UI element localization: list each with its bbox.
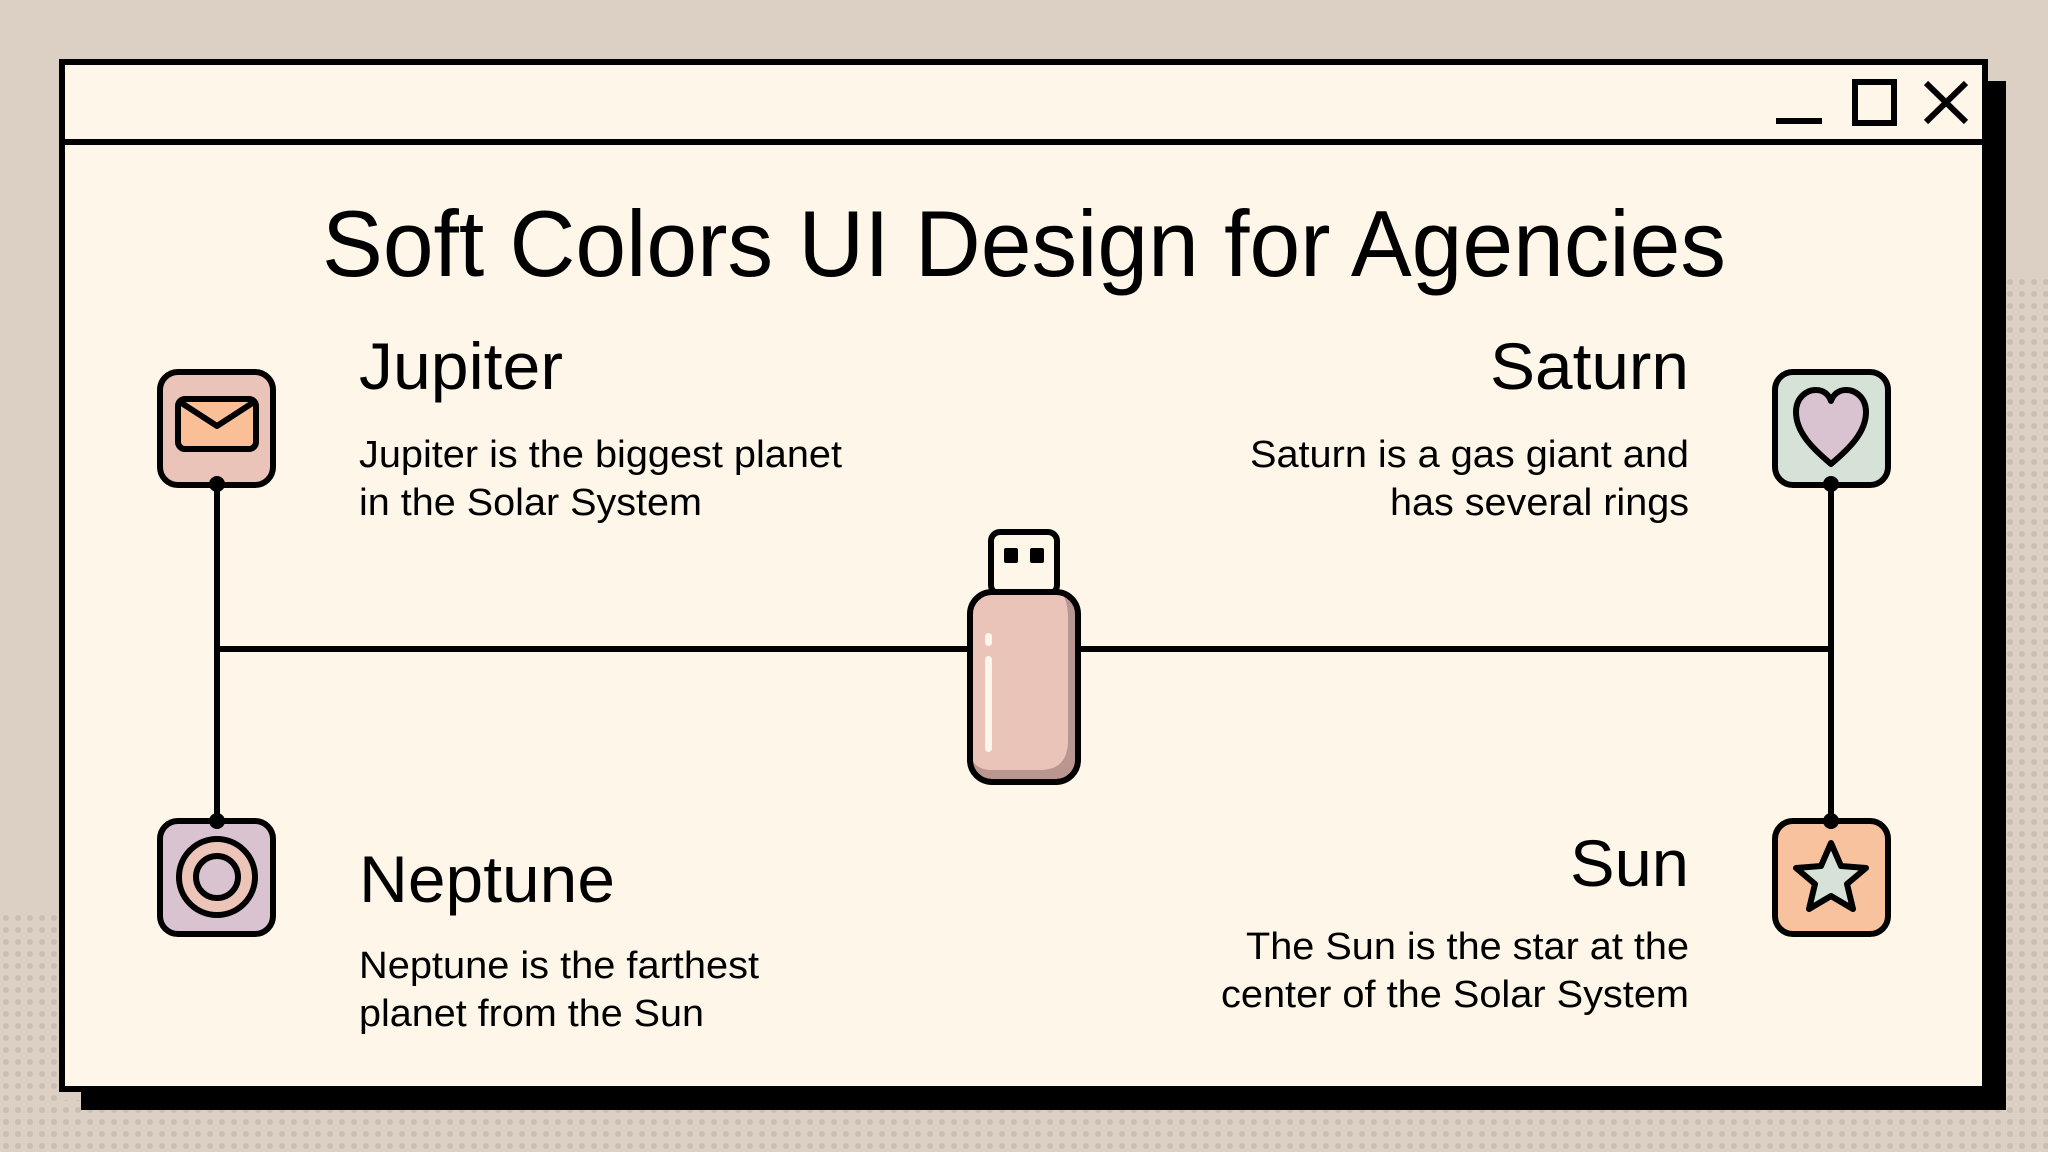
text: Sun: The Sun is the star at the <box>1246 926 1689 968</box>
window controls <box>1776 82 1966 123</box>
icon: star (Sun) <box>1775 813 1888 934</box>
text: Sun <box>1221 826 1689 1016</box>
text: Neptune: Neptune is the farthest <box>359 945 759 987</box>
text: Neptune: Neptune <box>359 842 615 916</box>
text: Sun: Sun <box>1570 826 1689 900</box>
text: Saturn: Saturn <box>1490 329 1689 403</box>
icon: envelope (Jupiter) <box>160 372 273 492</box>
text: Saturn: Saturn is a gas giant and <box>1250 434 1689 476</box>
connector lines <box>217 483 1831 822</box>
title: Soft Colors UI Design for Agencies <box>322 191 1726 296</box>
text: Saturn <box>1250 329 1689 524</box>
text: Sun: center of the Solar System <box>1221 974 1689 1016</box>
text: Saturn: has several rings <box>1390 482 1689 524</box>
text: Jupiter: Jupiter <box>359 329 563 403</box>
icon: usb drive <box>970 532 1078 782</box>
text: Neptune: planet from the Sun <box>359 993 704 1035</box>
text: Jupiter <box>359 329 842 524</box>
text: Jupiter: Jupiter is the biggest planet <box>359 434 842 476</box>
text: Neptune <box>359 842 759 1035</box>
icon: heart (Saturn) <box>1775 372 1888 492</box>
text: Jupiter: in the Solar System <box>359 482 702 524</box>
icon: ring (Neptune) <box>160 813 273 934</box>
